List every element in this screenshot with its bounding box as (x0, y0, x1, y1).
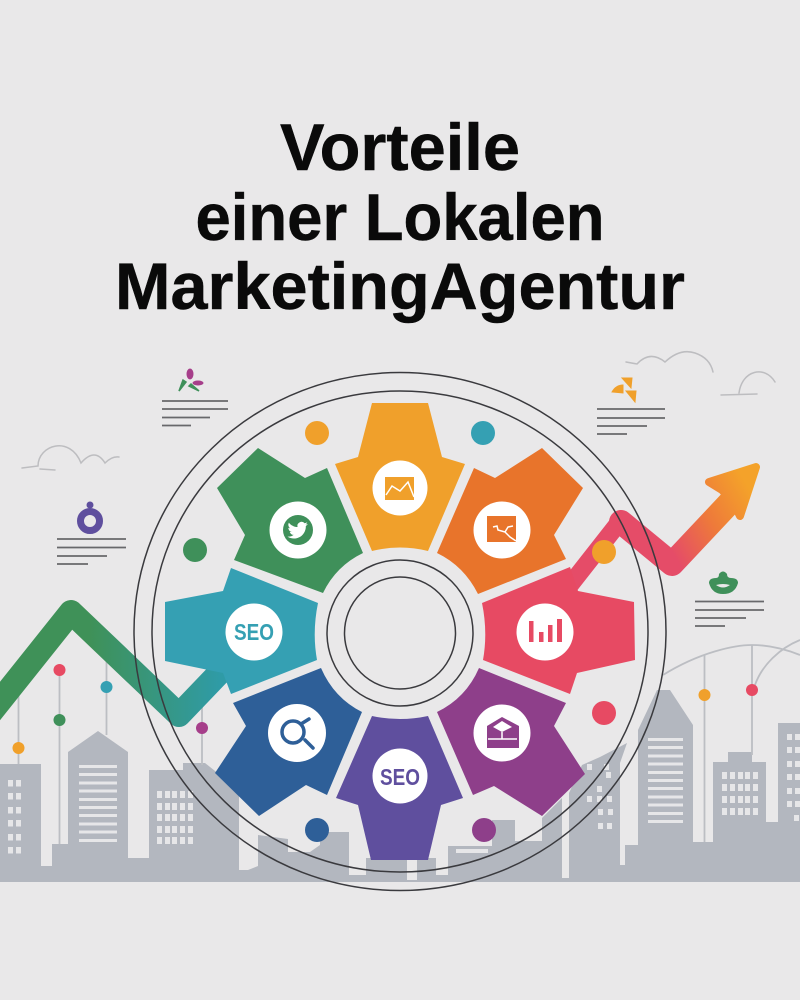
title: Vorteile (280, 110, 520, 184)
segment: red bar chart (482, 567, 635, 694)
title: einer Lokalen (196, 180, 604, 254)
note: flower icon with text lines (162, 368, 228, 426)
segment: green twitter (217, 448, 363, 593)
city skyline (0, 690, 800, 882)
segment: violet SEO (336, 716, 463, 860)
segment: purple house (437, 668, 585, 816)
title: MarketingAgentur (115, 249, 685, 323)
signal poles with dots (12, 640, 800, 844)
decorative coloured dots (183, 421, 616, 842)
segment: blue search (215, 668, 362, 816)
rising arrow (570, 467, 756, 585)
segment: orange chart (437, 448, 583, 594)
note: ring icon with text lines (57, 502, 126, 564)
green trend line (0, 612, 224, 716)
title (115, 110, 685, 323)
segment: teal SEO: SEO (234, 619, 274, 645)
note: amber icon with text lines (597, 378, 665, 434)
segment: violet SEO: SEO (380, 764, 420, 790)
segment: yellow mail (335, 403, 465, 551)
clouds (22, 352, 775, 470)
note: green hat icon with text lines (695, 572, 764, 626)
outer ring lines (134, 372, 666, 890)
segment: teal SEO (165, 568, 318, 694)
